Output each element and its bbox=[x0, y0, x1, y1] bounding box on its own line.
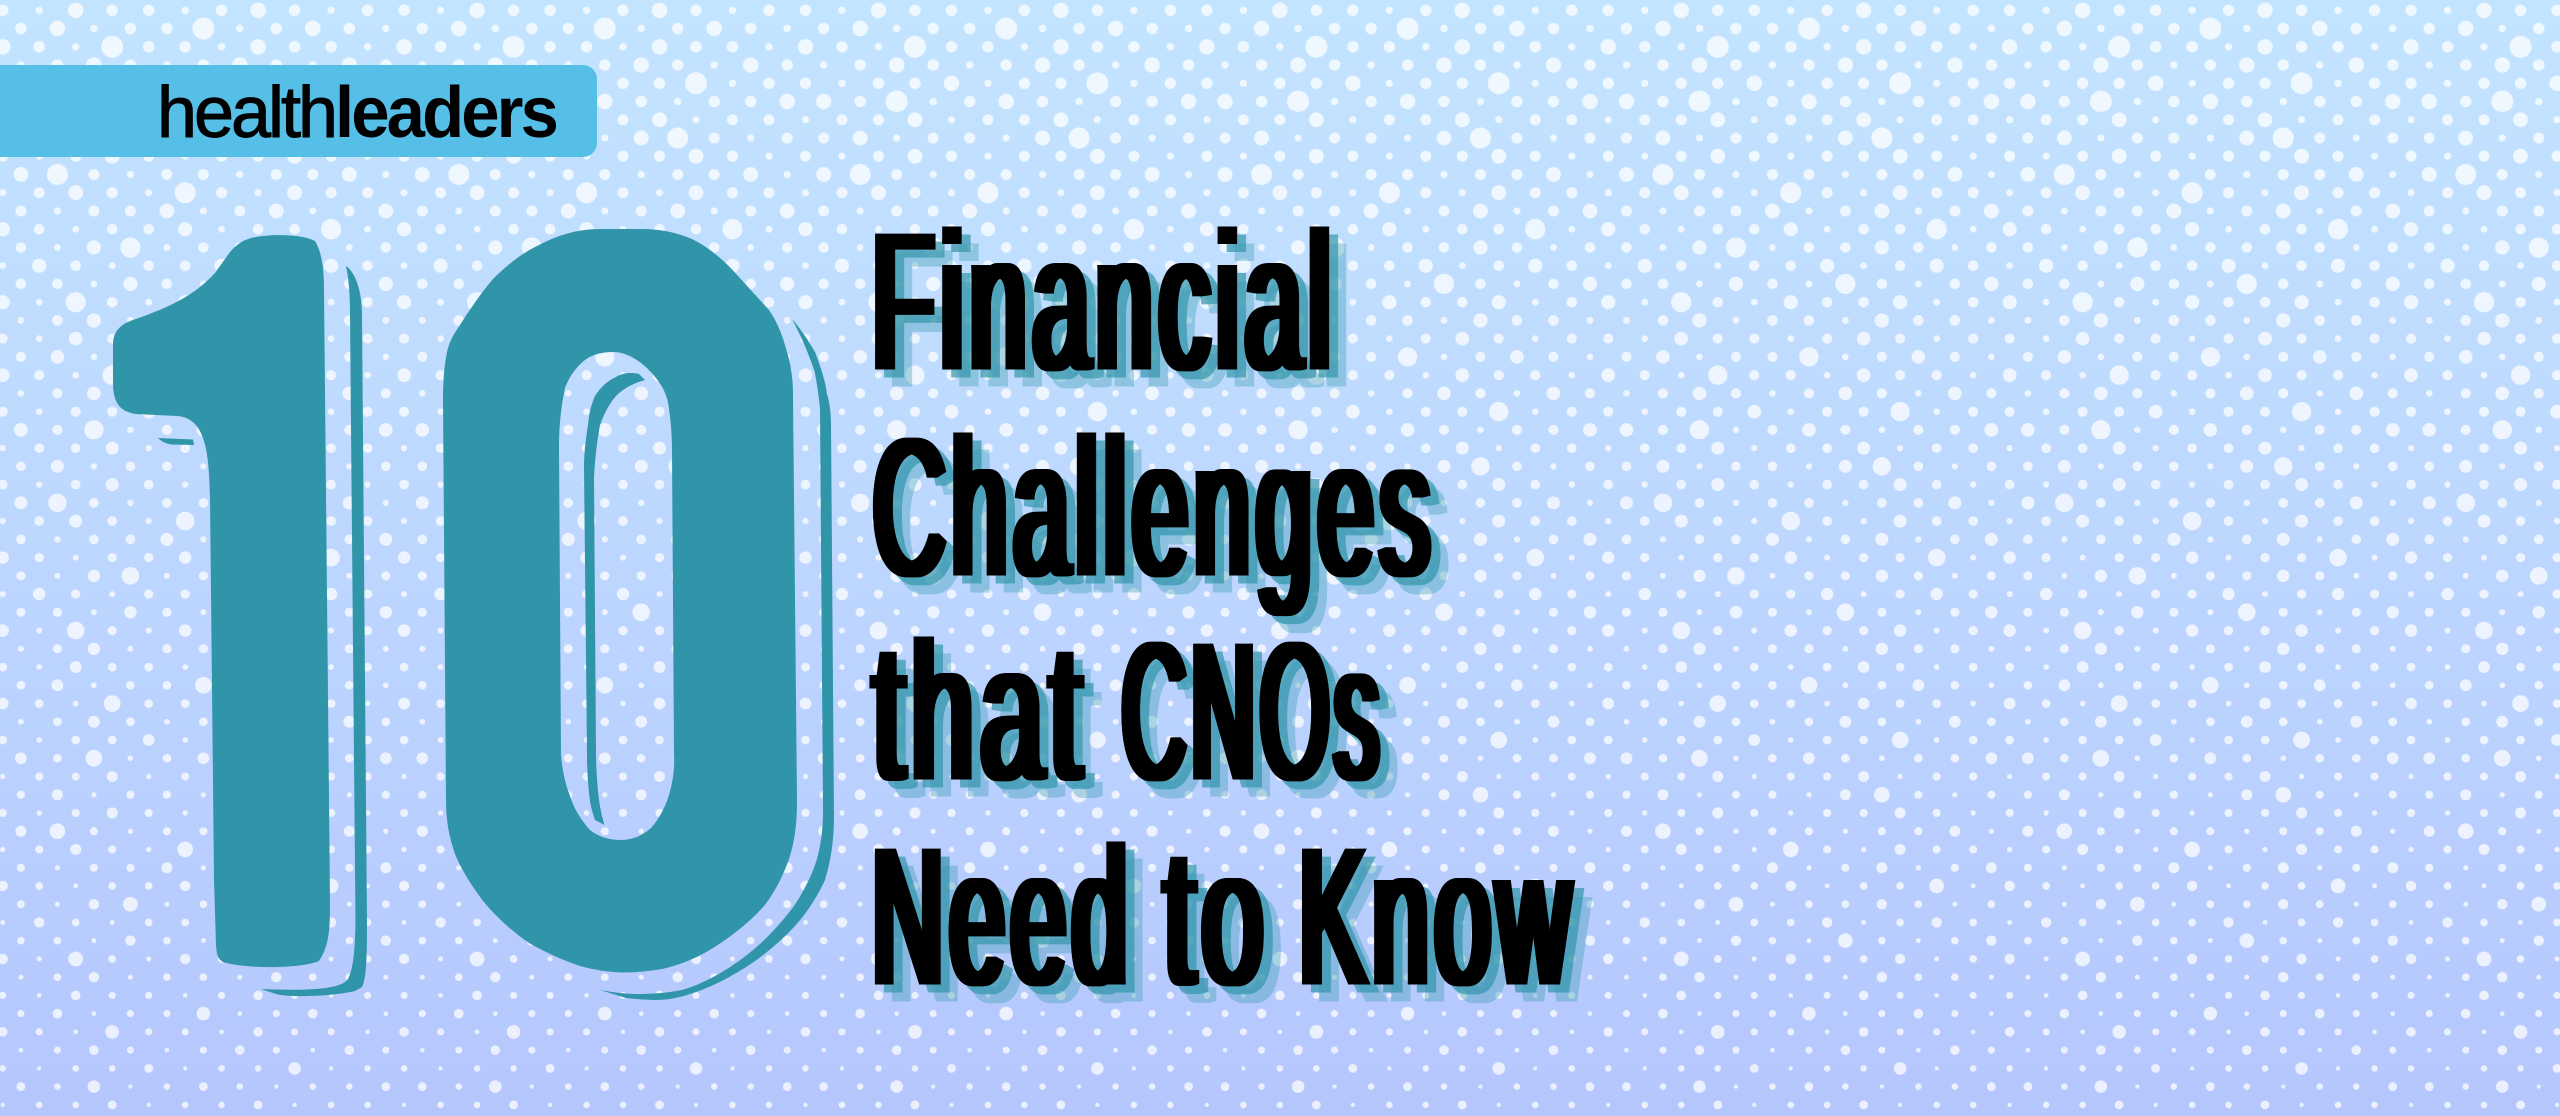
big numeral 10 bbox=[113, 229, 834, 1000]
numeral 1 bbox=[113, 235, 367, 996]
title line 4: Need bbox=[872, 807, 1133, 1026]
numeral 0 bbox=[443, 229, 834, 1000]
title line 3: that bbox=[873, 602, 1088, 821]
title: 10 Financial Challenges that CNOs Need to Know: CNOs bbox=[1122, 602, 1384, 821]
title line 4: Know bbox=[1299, 807, 1576, 1026]
logo wordmark: healthleaders: health bbox=[157, 73, 335, 153]
title: 10 Financial Challenges that CNOs Need to Know bbox=[872, 192, 1576, 1026]
title line 4: to bbox=[1164, 807, 1270, 1026]
logo bar bbox=[0, 65, 597, 157]
logo wordmark: healthleaders bbox=[157, 73, 557, 153]
title line 1: Financial bbox=[872, 192, 1337, 411]
title line 2: Challenges bbox=[873, 398, 1436, 617]
logo wordmark: healthleaders: leaders bbox=[335, 73, 557, 153]
